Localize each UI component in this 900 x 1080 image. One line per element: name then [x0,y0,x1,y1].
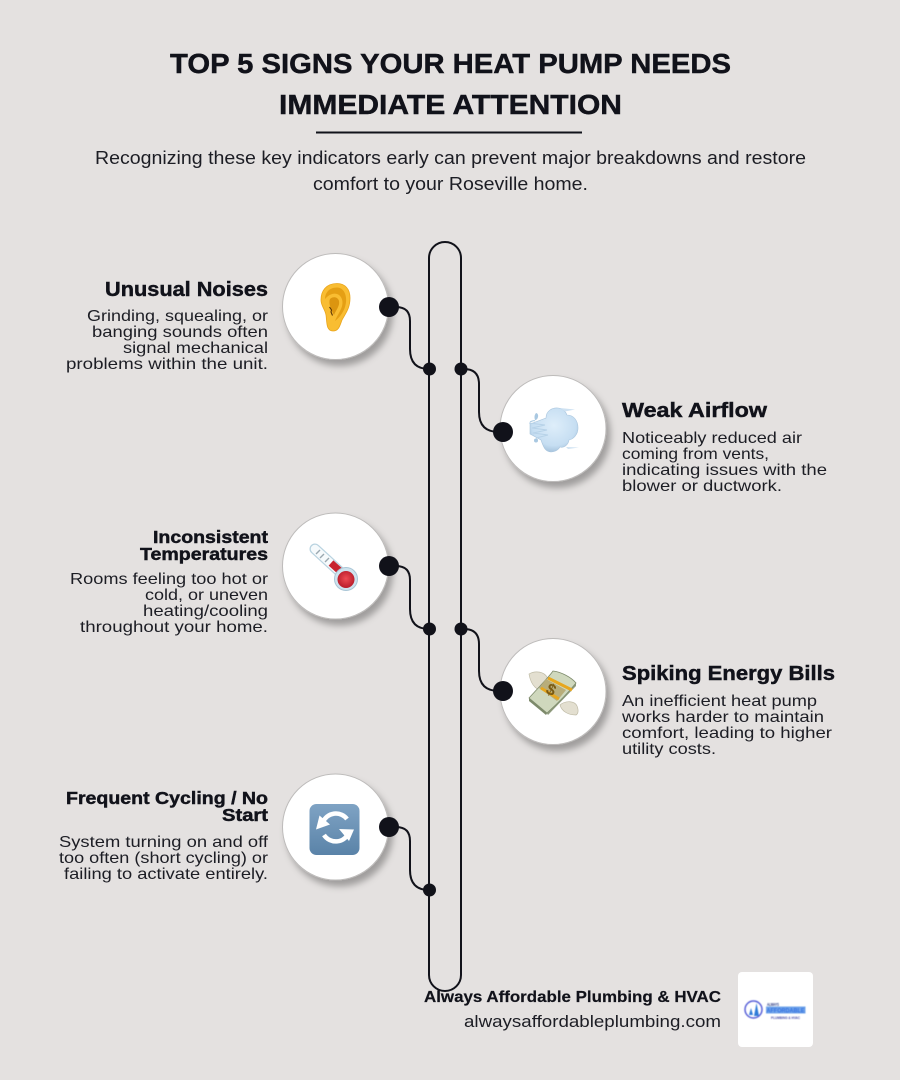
connector [454,622,513,701]
title [170,48,731,120]
description [622,430,827,495]
heading: Inconsistent [153,527,268,547]
heading: Unusual Noises [105,278,268,301]
description: throughout your home. [80,619,268,636]
connector [379,817,436,896]
description: Rooms feeling too hot or [70,571,269,588]
title underline [316,132,582,134]
description: cold, or uneven [145,587,268,604]
heading [66,788,268,825]
description: System turning on and off [59,834,269,851]
heading: Frequent Cycling / No [66,788,268,808]
description [66,308,269,373]
description: heating/cooling [143,603,268,620]
description [59,834,269,883]
heading: Spiking Energy Bills [622,662,835,685]
description [621,693,833,758]
heading: Weak Airflow [622,399,767,422]
title: IMMEDIATE ATTENTION [279,89,622,120]
icon circle: money with wings: $ [543,681,559,700]
description: failing to activate entirely. [64,866,268,883]
footer company info: alwaysaffordableplumbing.com [464,1012,721,1031]
sign 2: weak airflow [454,362,827,495]
icon circle: cycle arrows button [282,774,388,880]
description: too often (short cycling) or [59,850,269,867]
icon circle: wind cloud [500,376,606,482]
description: utility costs. [622,741,716,758]
description: signal mechanical [123,340,268,357]
description: banging sounds often [92,324,268,341]
footer company info: Always Affordable Plumbing & HVAC [424,989,721,1006]
description: An inefficient heat pump [622,693,817,710]
icon circle: ear [282,254,388,360]
icon circle: money with wings [500,638,606,744]
description: Noticeably reduced air [622,430,803,447]
subtitle: comfort to your Roseville home. [313,174,588,194]
connector [379,556,436,636]
description: problems within the unit. [66,356,268,373]
heading [140,527,268,564]
heading: Temperatures [140,544,268,564]
connector [454,362,513,442]
description: blower or ductwork. [622,478,782,495]
sign 4: spiking energy bills [454,622,835,758]
footer company info [424,989,721,1031]
title: TOP 5 SIGNS YOUR HEAT PUMP NEEDS [170,48,731,79]
subtitle: Recognizing these key indicators early can prevent major breakdowns and restore [95,148,806,168]
footer logo: PLUMBING & HVAC [771,1015,800,1020]
description: works harder to maintain [621,709,824,726]
footer logo: AFFORDABLE [766,1008,805,1014]
icon circle: thermometer [282,513,388,619]
sign 3: inconsistent temperatures [70,513,436,636]
connector [379,297,436,376]
description [70,571,269,636]
description: indicating issues with the [622,462,827,479]
footer logo: ALWAYS [767,1002,779,1007]
description: comfort, leading to higher [622,725,833,742]
description: coming from vents, [622,446,769,463]
description: Grinding, squealing, or [87,308,269,325]
central rail [429,242,461,991]
footer logo [738,972,813,1047]
sign 5: frequent cycling [59,774,436,896]
subtitle [95,148,806,194]
sign 1: unusual noises [66,254,436,376]
heading: Start [222,805,268,825]
